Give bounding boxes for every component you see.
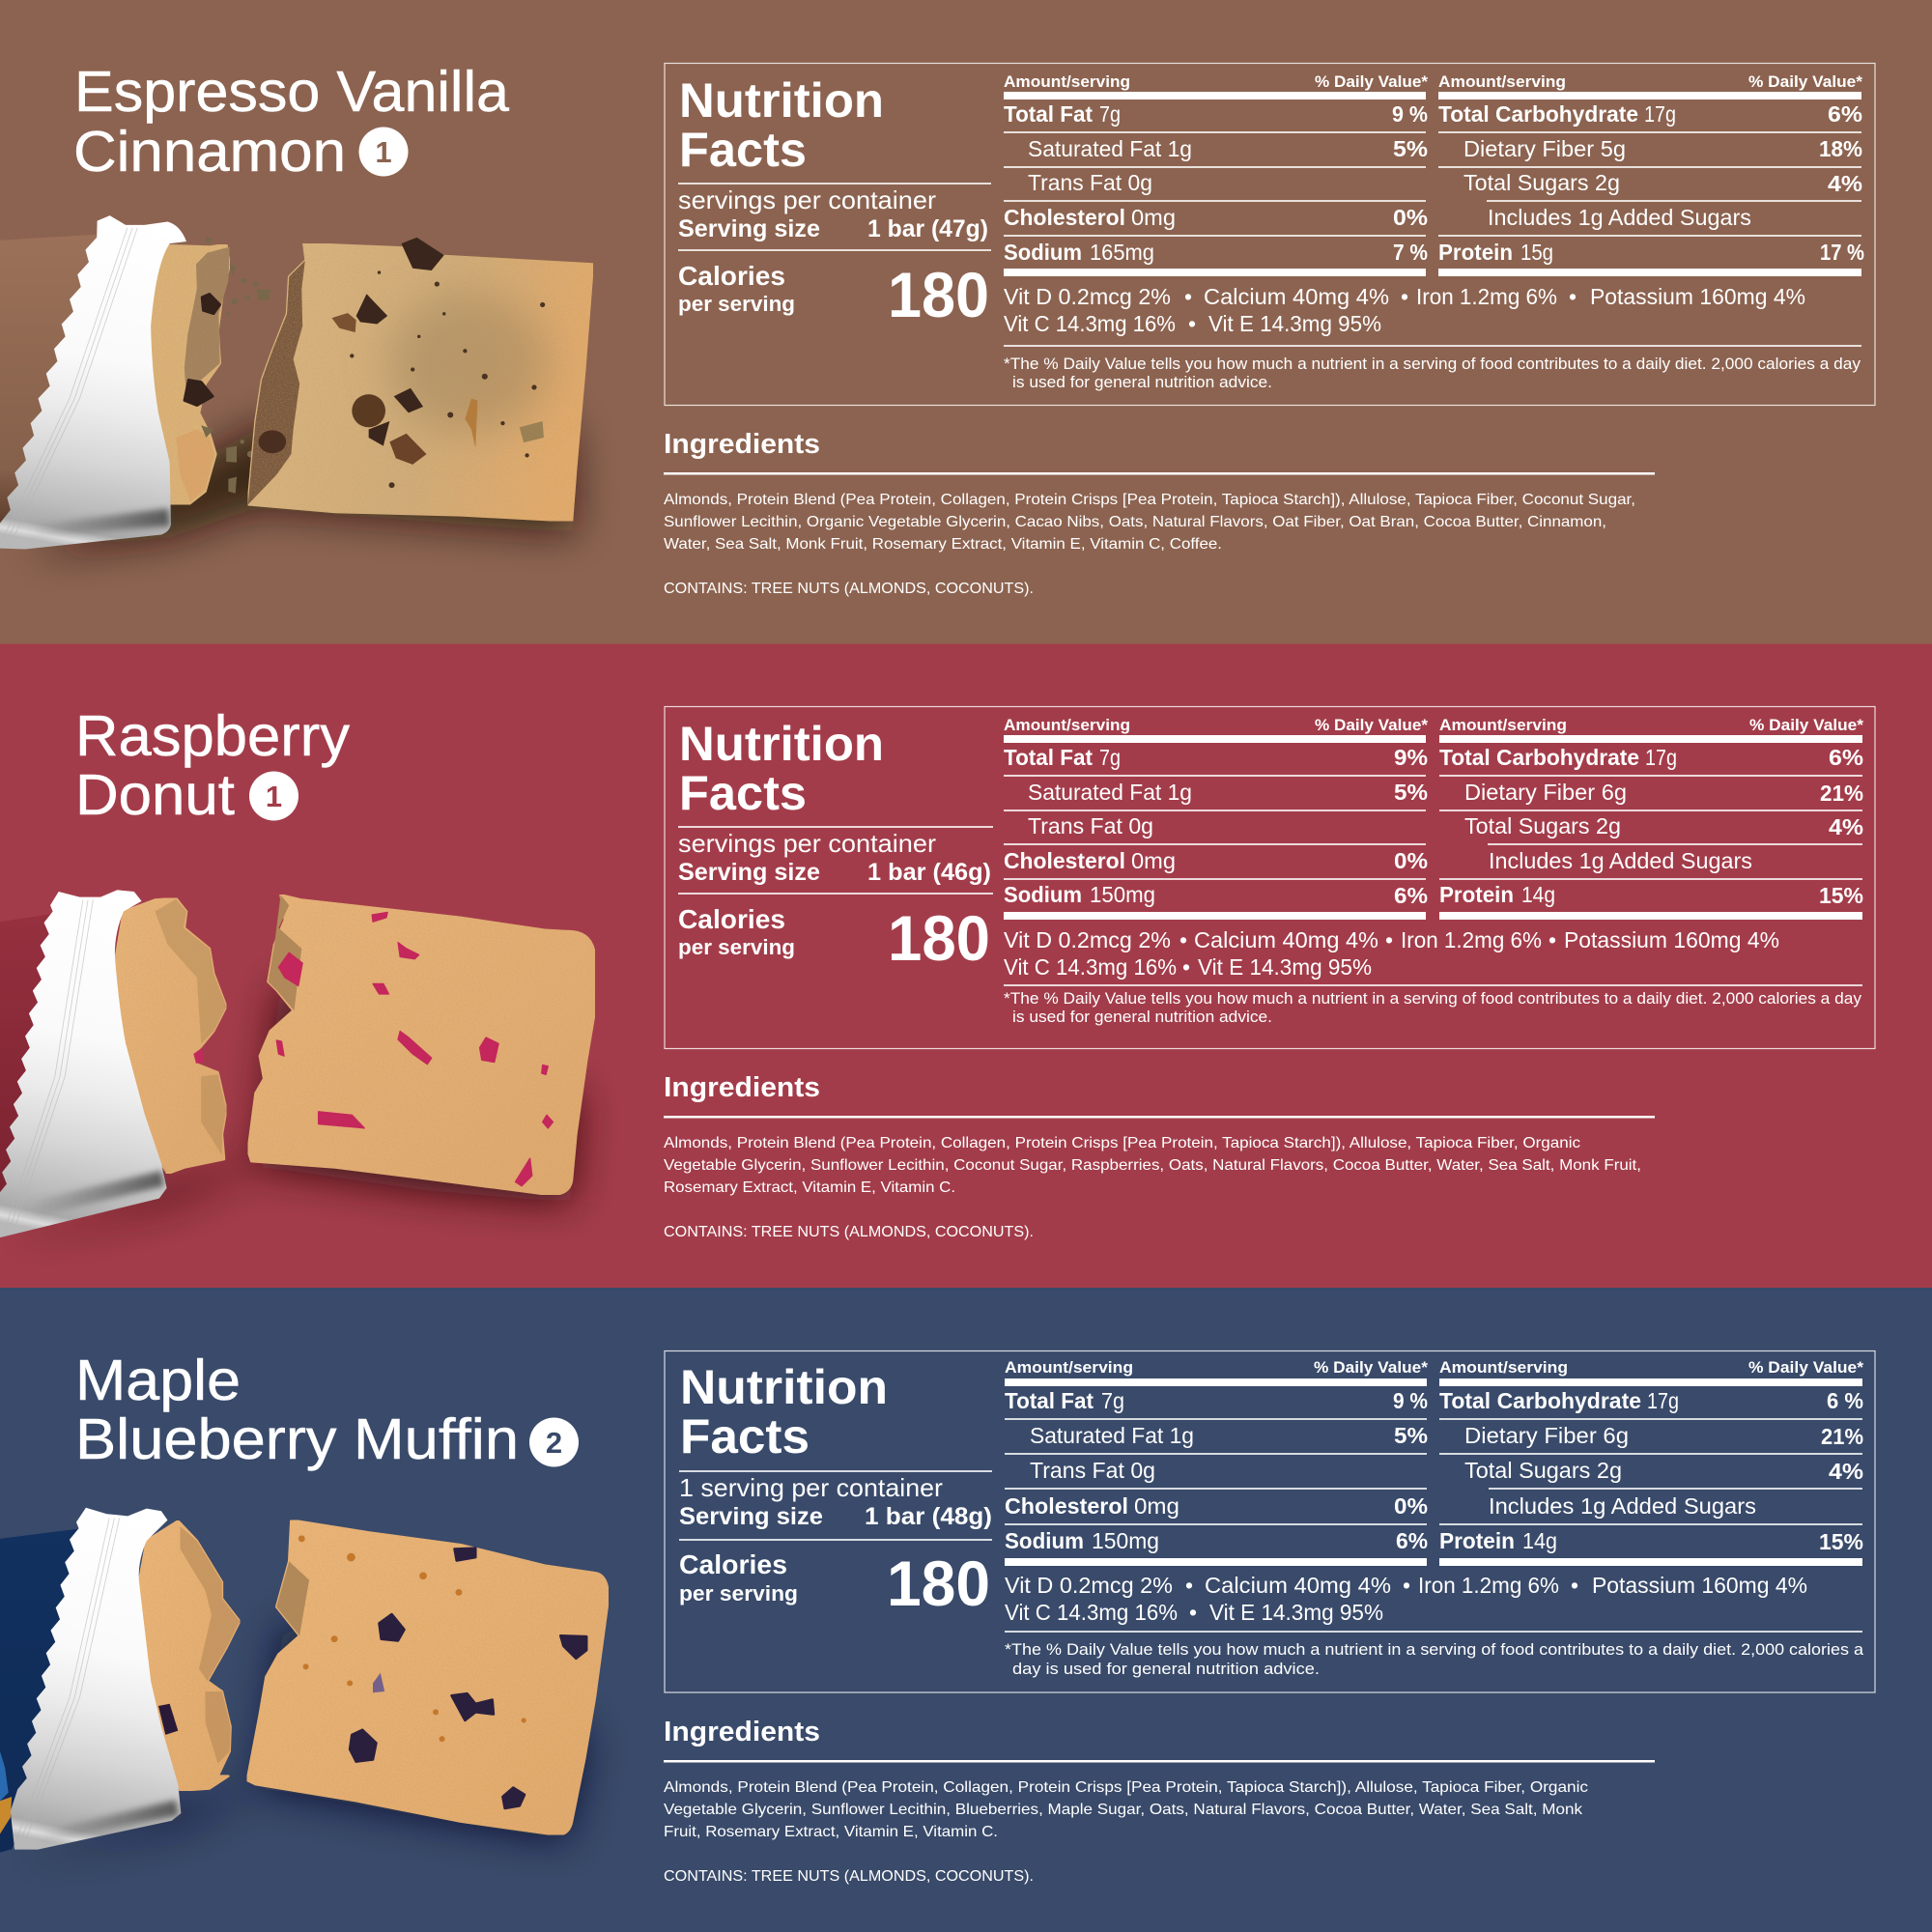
heading: Nutrition [680, 1360, 888, 1414]
right table: Total Carbohydrate [1438, 101, 1638, 127]
left table: Amount/serving [1004, 72, 1130, 91]
left table: Cholesterol [1004, 848, 1125, 873]
servings: Serving size [679, 1503, 823, 1530]
servings: 1 serving per container [679, 1473, 943, 1502]
left table: 0mg [1131, 848, 1176, 873]
left table: Amount/serving [1005, 1358, 1133, 1377]
panel: maple blueberry muffin background [0, 1288, 1932, 1932]
ingredients: raspberry: Rosemary Extract, Vitamin E, Vitamin C. [664, 1179, 955, 1196]
right table: 14g [1521, 882, 1555, 907]
chocolate pieces [259, 238, 544, 465]
servings [679, 1473, 992, 1530]
title: Espresso Vanilla Cinnamon: Espresso Vanilla [74, 60, 509, 124]
left table: 150mg [1092, 1528, 1159, 1553]
ingredients: raspberry: CONTAINS: TREE NUTS (ALMONDS, COCONUTS). [664, 1224, 1034, 1240]
left table: 0mg [1131, 205, 1176, 230]
vitamins: • [1548, 927, 1556, 952]
left table: 165mg [1090, 240, 1154, 265]
right table [1439, 716, 1863, 920]
vitamins: Vit C 14.3mg 16% [1005, 1600, 1178, 1625]
ingredients: espresso: Almonds, Protein Blend (Pea Protein, Collagen, Protein Crisps [Pea Protein, Tapioca Starch]), Allulose, Tapioca Fiber, Coconut Sugar, [664, 492, 1635, 508]
left table: Total Fat [1005, 1388, 1094, 1413]
servings: Serving size [678, 859, 820, 886]
vitamins: • [1188, 311, 1196, 336]
ingredients: blueberry: Fruit, Rosemary Extract, Vitamin E, Vitamin C. [664, 1824, 998, 1840]
foil crease [38, 1800, 179, 1843]
left table: 7g [1101, 1388, 1124, 1413]
left table: 0mg [1134, 1493, 1179, 1519]
left table: Cholesterol [1004, 205, 1125, 230]
calories: 180 [887, 1548, 990, 1619]
vitamins [1004, 927, 1779, 980]
ingredients: espresso: Water, Sea Salt, Monk Fruit, Rosemary Extract, Vitamin E, Vitamin C, Coffee. [664, 536, 1222, 553]
specks [350, 270, 545, 488]
right table: % Daily Value* [1748, 1358, 1863, 1377]
right table: Dietary Fiber 6g [1464, 780, 1627, 805]
panel: raspberry donut background [0, 643, 1932, 1289]
vitamins: Vit E 14.3mg 95% [1209, 1600, 1383, 1625]
right table: Total Carbohydrate [1439, 1388, 1641, 1413]
right table: % Daily Value* [1749, 716, 1863, 734]
left table: 7 % [1393, 240, 1428, 265]
right table: Total Sugars 2g [1464, 813, 1621, 838]
left table [1005, 1358, 1428, 1566]
heading: Facts [679, 123, 807, 177]
maple sugar specks [298, 1535, 526, 1742]
left table: 5% [1394, 780, 1428, 805]
small bar piece [151, 244, 230, 504]
right table: Dietary Fiber 5g [1463, 136, 1626, 161]
vitamins: Potassium 160mg 4% [1590, 284, 1805, 309]
illustration: raspberry bar [0, 890, 595, 1239]
right table: Amount/serving [1438, 72, 1566, 91]
vitamins: Vit E 14.3mg 95% [1198, 954, 1372, 980]
left table: 0% [1394, 848, 1428, 873]
vitamins: • [1189, 1600, 1197, 1625]
left table: Trans Fat 0g [1030, 1458, 1155, 1483]
small bar piece [139, 1520, 240, 1791]
servings [678, 829, 991, 886]
left table: Trans Fat 0g [1028, 170, 1152, 195]
right table: 6% [1829, 745, 1863, 770]
left table: 6% [1396, 1528, 1428, 1553]
vitamins: • [1182, 954, 1190, 980]
wrapper [0, 1528, 84, 1853]
heading: Nutrition [679, 717, 884, 771]
panel: nutrition facts espresso [665, 64, 1875, 406]
left table: 0% [1393, 205, 1428, 230]
right table: 6% [1828, 101, 1862, 127]
vitamins: Vit D 0.2mcg 2% [1005, 1573, 1173, 1598]
right table: 17 % [1820, 240, 1864, 265]
right table: Dietary Fiber 6g [1464, 1423, 1629, 1448]
right table: Includes 1g Added Sugars [1489, 848, 1752, 873]
vitamins [1004, 284, 1805, 336]
footnote [1004, 355, 1861, 391]
title: Maple Blueberry Muffin [75, 1349, 579, 1471]
heading [680, 1360, 888, 1463]
vitamins: • [1385, 927, 1393, 952]
ingredients: blueberry [664, 1717, 1655, 1885]
left table: Cholesterol [1005, 1493, 1128, 1519]
left table: 0% [1394, 1493, 1428, 1519]
vitamins: Vit C 14.3mg 16% [1004, 954, 1177, 980]
vitamins: Potassium 160mg 4% [1564, 927, 1779, 952]
title: Raspberry Donut [75, 704, 351, 827]
footnote: *The % Daily Value tells you how much a nutrient in a serving of food contributes to a daily diet. 2,000 calories a [1005, 1641, 1864, 1659]
right table: Total Sugars 2g [1463, 170, 1620, 195]
vitamins: Calcium 40mg 4% [1194, 927, 1378, 952]
ingredients: raspberry: Vegetable Glycerin, Sunflower Lecithin, Coconut Sugar, Raspberries, Oats, Natural Flavors, Cocoa Butter, Water, Sea Salt, Monk Fruit, [664, 1157, 1641, 1174]
blueberry in small piece [158, 1704, 178, 1735]
right table: 15% [1819, 1529, 1863, 1554]
vitamins: Calcium 40mg 4% [1205, 1573, 1391, 1598]
right table: Protein [1439, 1528, 1515, 1553]
left table: Trans Fat 0g [1028, 813, 1153, 838]
right table: 17g [1647, 1388, 1679, 1413]
servings: servings per container [678, 185, 936, 214]
shadow under bar [4, 983, 579, 1239]
title: Raspberry Donut: Donut [75, 763, 235, 827]
ingredients: espresso: Sunflower Lecithin, Organic Vegetable Glycerin, Cacao Nibs, Oats, Natural Flavors, Oat Fiber, Oat Bran, Cocoa Butter, Cinnamon, [664, 514, 1606, 530]
right table: 15g [1520, 240, 1553, 265]
right table: 4% [1829, 814, 1863, 839]
left table: 7g [1099, 745, 1121, 770]
vitamins: • [1179, 927, 1187, 952]
servings [678, 185, 988, 242]
foil [0, 890, 167, 1237]
vitamins: • [1185, 1573, 1193, 1598]
panel: espresso vanilla cinnamon background [0, 0, 1932, 644]
small bar piece [115, 898, 226, 1174]
right table: Amount/serving [1439, 1358, 1568, 1377]
left table: 7g [1099, 101, 1121, 127]
calories: 180 [888, 902, 990, 974]
right table: Protein [1438, 240, 1513, 265]
vitamins: Iron 1.2mg 6% [1416, 284, 1557, 309]
right table: 17g [1645, 745, 1677, 770]
left table: 9 % [1393, 1388, 1428, 1413]
left table: Saturated Fat 1g [1030, 1423, 1194, 1448]
left table: Amount/serving [1004, 716, 1130, 734]
calories [678, 902, 990, 974]
calories: Calories [678, 904, 785, 934]
raspberry pieces [276, 912, 553, 1186]
footnote: *The % Daily Value tells you how much a nutrient in a serving of food contributes to a daily diet. 2,000 calories a day [1004, 990, 1862, 1008]
title: Raspberry Donut: 1 [266, 780, 282, 813]
left table: % Daily Value* [1314, 1358, 1428, 1377]
calories: per serving [678, 935, 795, 959]
servings: Serving size [678, 215, 820, 242]
calories [679, 1548, 990, 1619]
right table: 14g [1522, 1528, 1557, 1553]
calories: Calories [679, 1549, 787, 1579]
right table: 15% [1819, 883, 1863, 908]
calories: per serving [678, 292, 795, 316]
foil seam [13, 1518, 120, 1849]
ingredients: espresso: CONTAINS: TREE NUTS (ALMONDS, COCONUTS). [664, 581, 1034, 597]
footnote [1004, 990, 1862, 1026]
ingredients: raspberry: Almonds, Protein Blend (Pea Protein, Collagen, Protein Crisps [Pea Protein, Tapioca Starch]), Allulose, Tapioca Fiber, Organic [664, 1135, 1580, 1151]
calories: per serving [679, 1581, 798, 1605]
vitamins [1005, 1573, 1807, 1625]
title: Espresso Vanilla Cinnamon: 1 [375, 135, 392, 169]
servings: 1 bar (47g) [867, 215, 988, 242]
foil crease [29, 509, 170, 537]
footnote: *The % Daily Value tells you how much a nutrient in a serving of food contributes to a daily diet. 2,000 calories a day [1004, 355, 1861, 373]
ingredients: raspberry: Ingredients [664, 1072, 820, 1103]
ingredients: blueberry: Vegetable Glycerin, Sunflower Lecithin, Blueberries, Maple Sugar, Oats, Natural Flavors, Cocoa Butter, Water, Sea Salt, Monk [664, 1802, 1583, 1818]
vitamins: Iron 1.2mg 6% [1401, 927, 1542, 952]
left table [1004, 72, 1428, 276]
big bar piece [247, 1520, 609, 1834]
left table: 9 % [1392, 101, 1428, 127]
left table: 9% [1394, 745, 1428, 770]
big bar piece [248, 243, 593, 521]
wrapper [0, 235, 100, 528]
title: Espresso Vanilla Cinnamon: Cinnamon [73, 120, 346, 184]
foil crease [25, 1171, 164, 1219]
vitamins: • [1569, 284, 1577, 309]
left table: Total Fat [1004, 101, 1093, 127]
right table: Includes 1g Added Sugars [1488, 205, 1751, 230]
heading: Facts [680, 1409, 810, 1463]
title: Maple Blueberry Muffin: Blueberry Muffin [75, 1407, 519, 1471]
left table: Saturated Fat 1g [1028, 136, 1192, 161]
vitamins: • [1571, 1573, 1578, 1598]
right table: 21% [1820, 781, 1863, 806]
heading [679, 73, 884, 177]
heading: Nutrition [679, 73, 884, 128]
panel: nutrition facts blueberry [665, 1350, 1875, 1692]
left table [1004, 716, 1428, 920]
right table: Includes 1g Added Sugars [1489, 1493, 1756, 1519]
vitamins: Potassium 160mg 4% [1592, 1573, 1807, 1598]
left table: Sodium [1004, 240, 1082, 265]
vitamins: Iron 1.2mg 6% [1418, 1573, 1559, 1598]
right table: Total Sugars 2g [1464, 1458, 1622, 1483]
illustration: blueberry bar [0, 1508, 609, 1857]
servings: 1 bar (46g) [867, 859, 991, 886]
left table: Sodium [1004, 882, 1082, 907]
vitamins: Vit D 0.2mcg 2% [1004, 927, 1171, 952]
left table: % Daily Value* [1315, 72, 1428, 91]
foil seam [3, 900, 93, 1236]
heading: Facts [679, 766, 807, 820]
left table: % Daily Value* [1315, 716, 1428, 734]
ingredients: raspberry [664, 1072, 1655, 1240]
vitamins: Calcium 40mg 4% [1204, 284, 1389, 309]
footnote: is used for general nutrition advice. [1012, 1009, 1272, 1026]
right table: % Daily Value* [1748, 72, 1862, 91]
right table: Total Carbohydrate [1439, 745, 1639, 770]
wrapper art [0, 1751, 12, 1833]
title: Maple Blueberry Muffin: 2 [546, 1426, 562, 1460]
vitamins: • [1184, 284, 1192, 309]
foil [0, 215, 186, 549]
left table: 5% [1394, 1423, 1428, 1448]
title: Raspberry Donut: Raspberry [75, 704, 351, 768]
heading [679, 717, 884, 820]
right table [1438, 72, 1864, 276]
vitamins: Vit E 14.3mg 95% [1208, 311, 1381, 336]
right table: 21% [1821, 1424, 1863, 1449]
right table: 4% [1828, 171, 1862, 196]
footnote: is used for general nutrition advice. [1012, 374, 1272, 391]
illustration: espresso bar [0, 215, 593, 554]
left table: 150mg [1090, 882, 1155, 907]
calories: Calories [678, 261, 785, 291]
vitamins: • [1403, 1573, 1410, 1598]
big bar piece [248, 895, 595, 1195]
title: Espresso Vanilla Cinnamon [73, 60, 509, 184]
ingredients: blueberry: CONTAINS: TREE NUTS (ALMONDS, COCONUTS). [664, 1868, 1034, 1885]
foil seam [0, 228, 137, 549]
right table: Protein [1439, 882, 1514, 907]
right table: 4% [1829, 1459, 1863, 1484]
left table: Sodium [1005, 1528, 1084, 1553]
crumbs [201, 238, 270, 494]
right table: 6 % [1827, 1388, 1863, 1413]
servings: servings per container [678, 829, 936, 858]
shadow under bar [29, 425, 574, 554]
title: Maple Blueberry Muffin: Maple [75, 1349, 241, 1412]
left table: Total Fat [1004, 745, 1093, 770]
calories [678, 259, 989, 330]
footnote: day is used for general nutrition advice. [1012, 1661, 1320, 1678]
right table [1439, 1358, 1863, 1566]
calories: 180 [888, 259, 989, 330]
left table: 6% [1394, 883, 1428, 908]
left table: 5% [1393, 136, 1428, 161]
ingredients: espresso [664, 429, 1655, 597]
panel: nutrition facts raspberry [665, 707, 1875, 1049]
ingredients: blueberry: Almonds, Protein Blend (Pea Protein, Collagen, Protein Crisps [Pea Protein, Tapioca Starch]), Allulose, Tapioca Fiber, Organic [664, 1779, 1588, 1796]
right table: 18% [1819, 136, 1862, 161]
vitamins: Vit D 0.2mcg 2% [1004, 284, 1171, 309]
raspberry in small piece [193, 1048, 204, 1064]
foil [11, 1508, 181, 1850]
right table: 17g [1644, 101, 1676, 127]
chips in small piece [185, 294, 220, 406]
footnote [1005, 1641, 1864, 1678]
servings: 1 bar (48g) [865, 1503, 992, 1530]
wrapper [0, 914, 59, 1196]
shadow under bar [21, 1621, 586, 1857]
ingredients: espresso: Ingredients [664, 429, 820, 460]
ingredients: blueberry: Ingredients [664, 1717, 820, 1747]
right table: Amount/serving [1439, 716, 1567, 734]
vitamins: Vit C 14.3mg 16% [1004, 311, 1176, 336]
left table: Saturated Fat 1g [1028, 780, 1192, 805]
blueberries [350, 1548, 586, 1808]
vitamins: • [1401, 284, 1408, 309]
